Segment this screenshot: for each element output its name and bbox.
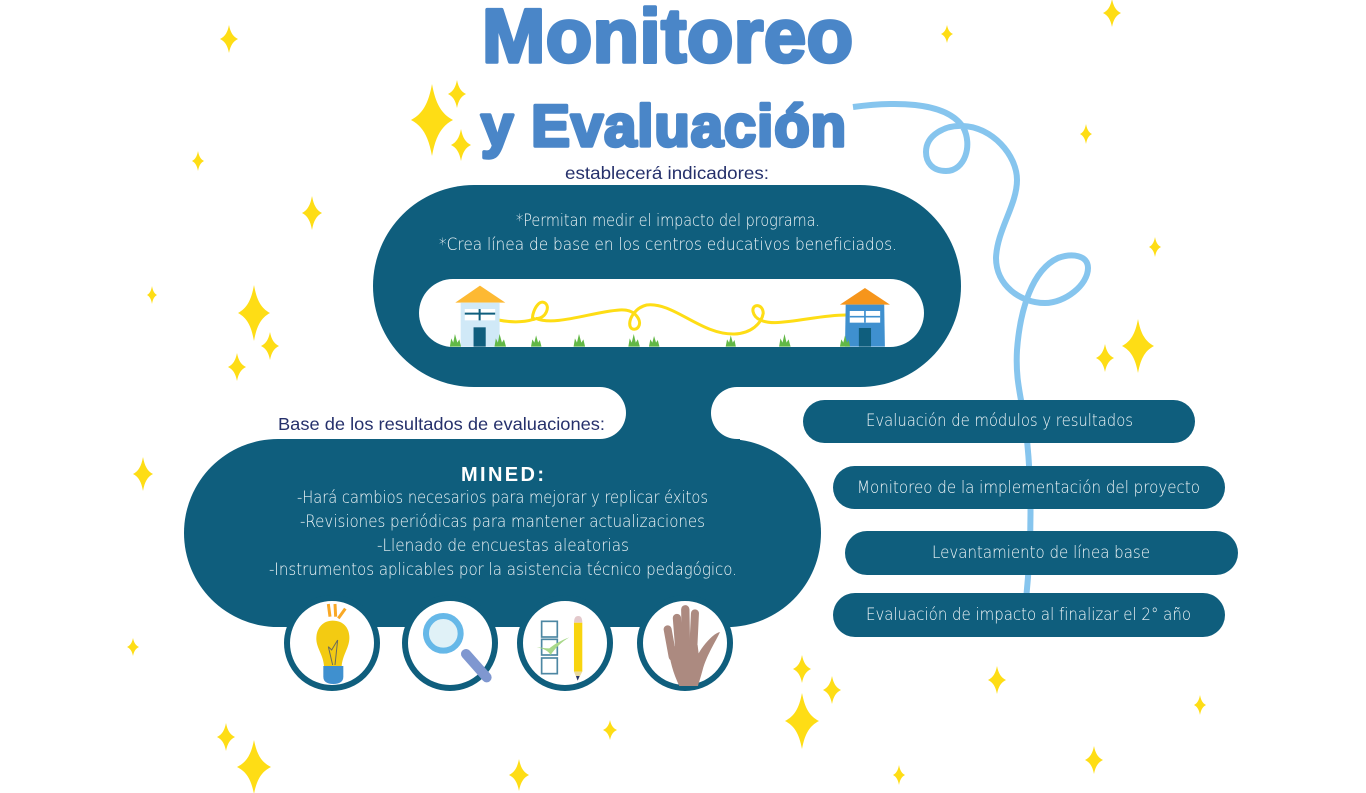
curly light-blue ribbon line: [853, 104, 1088, 600]
text block: indicators: *Permitan medir el impacto del programa.: [516, 211, 820, 230]
yellow road: [499, 302, 846, 334]
heading: base de los resultados: Base de los resultados de evaluaciones:: [278, 414, 605, 434]
icon: magnifying glass: [426, 616, 487, 677]
pill: evaluación de módulos: Evaluación de módulos y resultados: [866, 411, 1133, 430]
pill: evaluación de impacto: Evaluación de impacto al finalizar el 2° año: [866, 605, 1191, 624]
text block: indicators: [439, 211, 897, 254]
grass tufts: [450, 334, 850, 347]
text block: MINED actions: -Hará cambios necesarios para mejorar y replicar éxitos: [297, 488, 708, 507]
right house: [840, 288, 890, 347]
panel: indicators and evaluation blob: [184, 185, 961, 627]
icon: light bulb: [316, 604, 349, 684]
left house: [455, 286, 505, 347]
icon row: [287, 598, 730, 688]
pill: monitoreo de la implementación: Monitoreo de la implementación del proyecto: [857, 478, 1200, 497]
pill: levantamiento de línea base: [845, 531, 1238, 575]
pill: evaluación de módulos: [803, 400, 1195, 443]
icon: checklist and pencil: [537, 616, 582, 681]
text block: indicators: *Crea línea de base en los centros educativos beneficiados.: [439, 235, 897, 254]
title: [481, 0, 853, 159]
title: y Evaluación: [481, 94, 846, 159]
text block: MINED actions: -Revisiones periódicas para mantener actualizaciones: [300, 512, 705, 531]
text block: MINED actions: -Llenado de encuestas aleatorias: [377, 536, 629, 555]
pill: monitoreo de la implementación: [833, 466, 1225, 509]
icon: raised hand: [668, 609, 720, 686]
heading: MINED: MINED:: [461, 464, 544, 486]
subtitle: establecerá indicadores: establecerá indicadores:: [565, 163, 769, 183]
text block: MINED actions: -Instrumentos aplicables por la asistencia técnico pedagógico.: [269, 560, 737, 579]
decorative yellow sparkles: [127, 0, 1206, 793]
panel: action pills: [803, 400, 1238, 637]
pill: evaluación de impacto: [833, 593, 1225, 637]
illustration: houses joined by yellow road: [419, 279, 924, 347]
text block: MINED actions: [269, 488, 737, 579]
pill: levantamiento de línea base: Levantamiento de línea base: [932, 543, 1150, 562]
